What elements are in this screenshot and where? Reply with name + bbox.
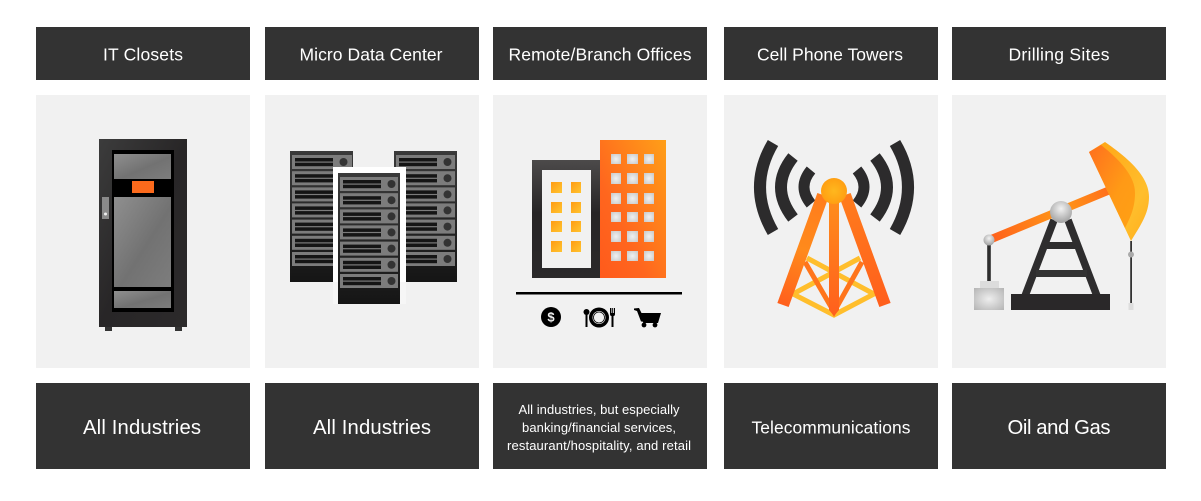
label: All Industries: All Industries xyxy=(313,417,431,439)
panel: Remote/Branch Offices xyxy=(493,27,707,469)
label: All Industries xyxy=(265,383,479,469)
heading: Cell Phone Towers: Cell Phone Towers xyxy=(757,44,903,64)
label: All industries, but especially banking/financial services, restaurant/hospitality, and retail: restaurant/hospitality, and retail xyxy=(507,438,691,453)
panel: Micro Data Center xyxy=(265,27,479,469)
icon: shopping cart xyxy=(634,308,661,327)
icon: orange office building xyxy=(600,140,666,278)
label: All Industries xyxy=(36,383,250,469)
icon: plate and cutlery xyxy=(584,308,615,328)
panel: IT Closets xyxy=(36,27,250,469)
heading: Remote/Branch Offices xyxy=(493,27,707,80)
icon: dollar coin xyxy=(541,307,561,327)
label: Oil and Gas xyxy=(952,383,1166,469)
icon: dollar coin: $ xyxy=(547,310,555,324)
image panel: Remote/Branch Offices xyxy=(493,95,707,368)
image panel: Drilling Sites xyxy=(952,95,1166,368)
panel: Drilling Sites xyxy=(952,27,1166,469)
icon: tower xyxy=(783,178,885,316)
label: All Industries: All Industries xyxy=(83,417,201,439)
icon: radio waves xyxy=(760,143,908,232)
panel: Cell Phone Towers xyxy=(724,27,938,469)
icon: dark office building xyxy=(532,160,600,278)
icon: pumpjack xyxy=(974,142,1149,310)
icon: left server stack xyxy=(290,151,353,282)
label: Telecommunications xyxy=(724,383,938,469)
label: Telecommunications: Telecommunications xyxy=(752,418,911,438)
heading: Micro Data Center xyxy=(265,27,479,80)
heading: IT Closets: IT Closets xyxy=(103,44,183,64)
heading: Drilling Sites: Drilling Sites xyxy=(1008,44,1110,64)
icon: right server stack xyxy=(394,151,457,282)
image panel: Micro Data Center xyxy=(265,95,479,368)
label: All industries, but especially banking/financial services, restaurant/hospitality, and retail xyxy=(493,383,707,469)
heading: IT Closets xyxy=(36,27,250,80)
label: Oil and Gas: Oil and Gas xyxy=(1008,417,1110,439)
label: All industries, but especially banking/financial services, restaurant/hospitality, and retail: All industries, but especially xyxy=(518,402,680,417)
image panel: IT Closets xyxy=(36,95,250,368)
image panel: Cell Phone Towers xyxy=(724,95,938,368)
icon: server rack cabinet xyxy=(99,139,187,331)
heading: Drilling Sites xyxy=(952,27,1166,80)
icon: center server stack xyxy=(333,167,406,304)
label: All industries, but especially banking/financial services, restaurant/hospitality, and retail: banking/financial services, xyxy=(522,420,676,435)
heading: Cell Phone Towers xyxy=(724,27,938,80)
heading: Remote/Branch Offices: Remote/Branch Offices xyxy=(508,44,692,64)
heading: Micro Data Center: Micro Data Center xyxy=(300,44,443,64)
